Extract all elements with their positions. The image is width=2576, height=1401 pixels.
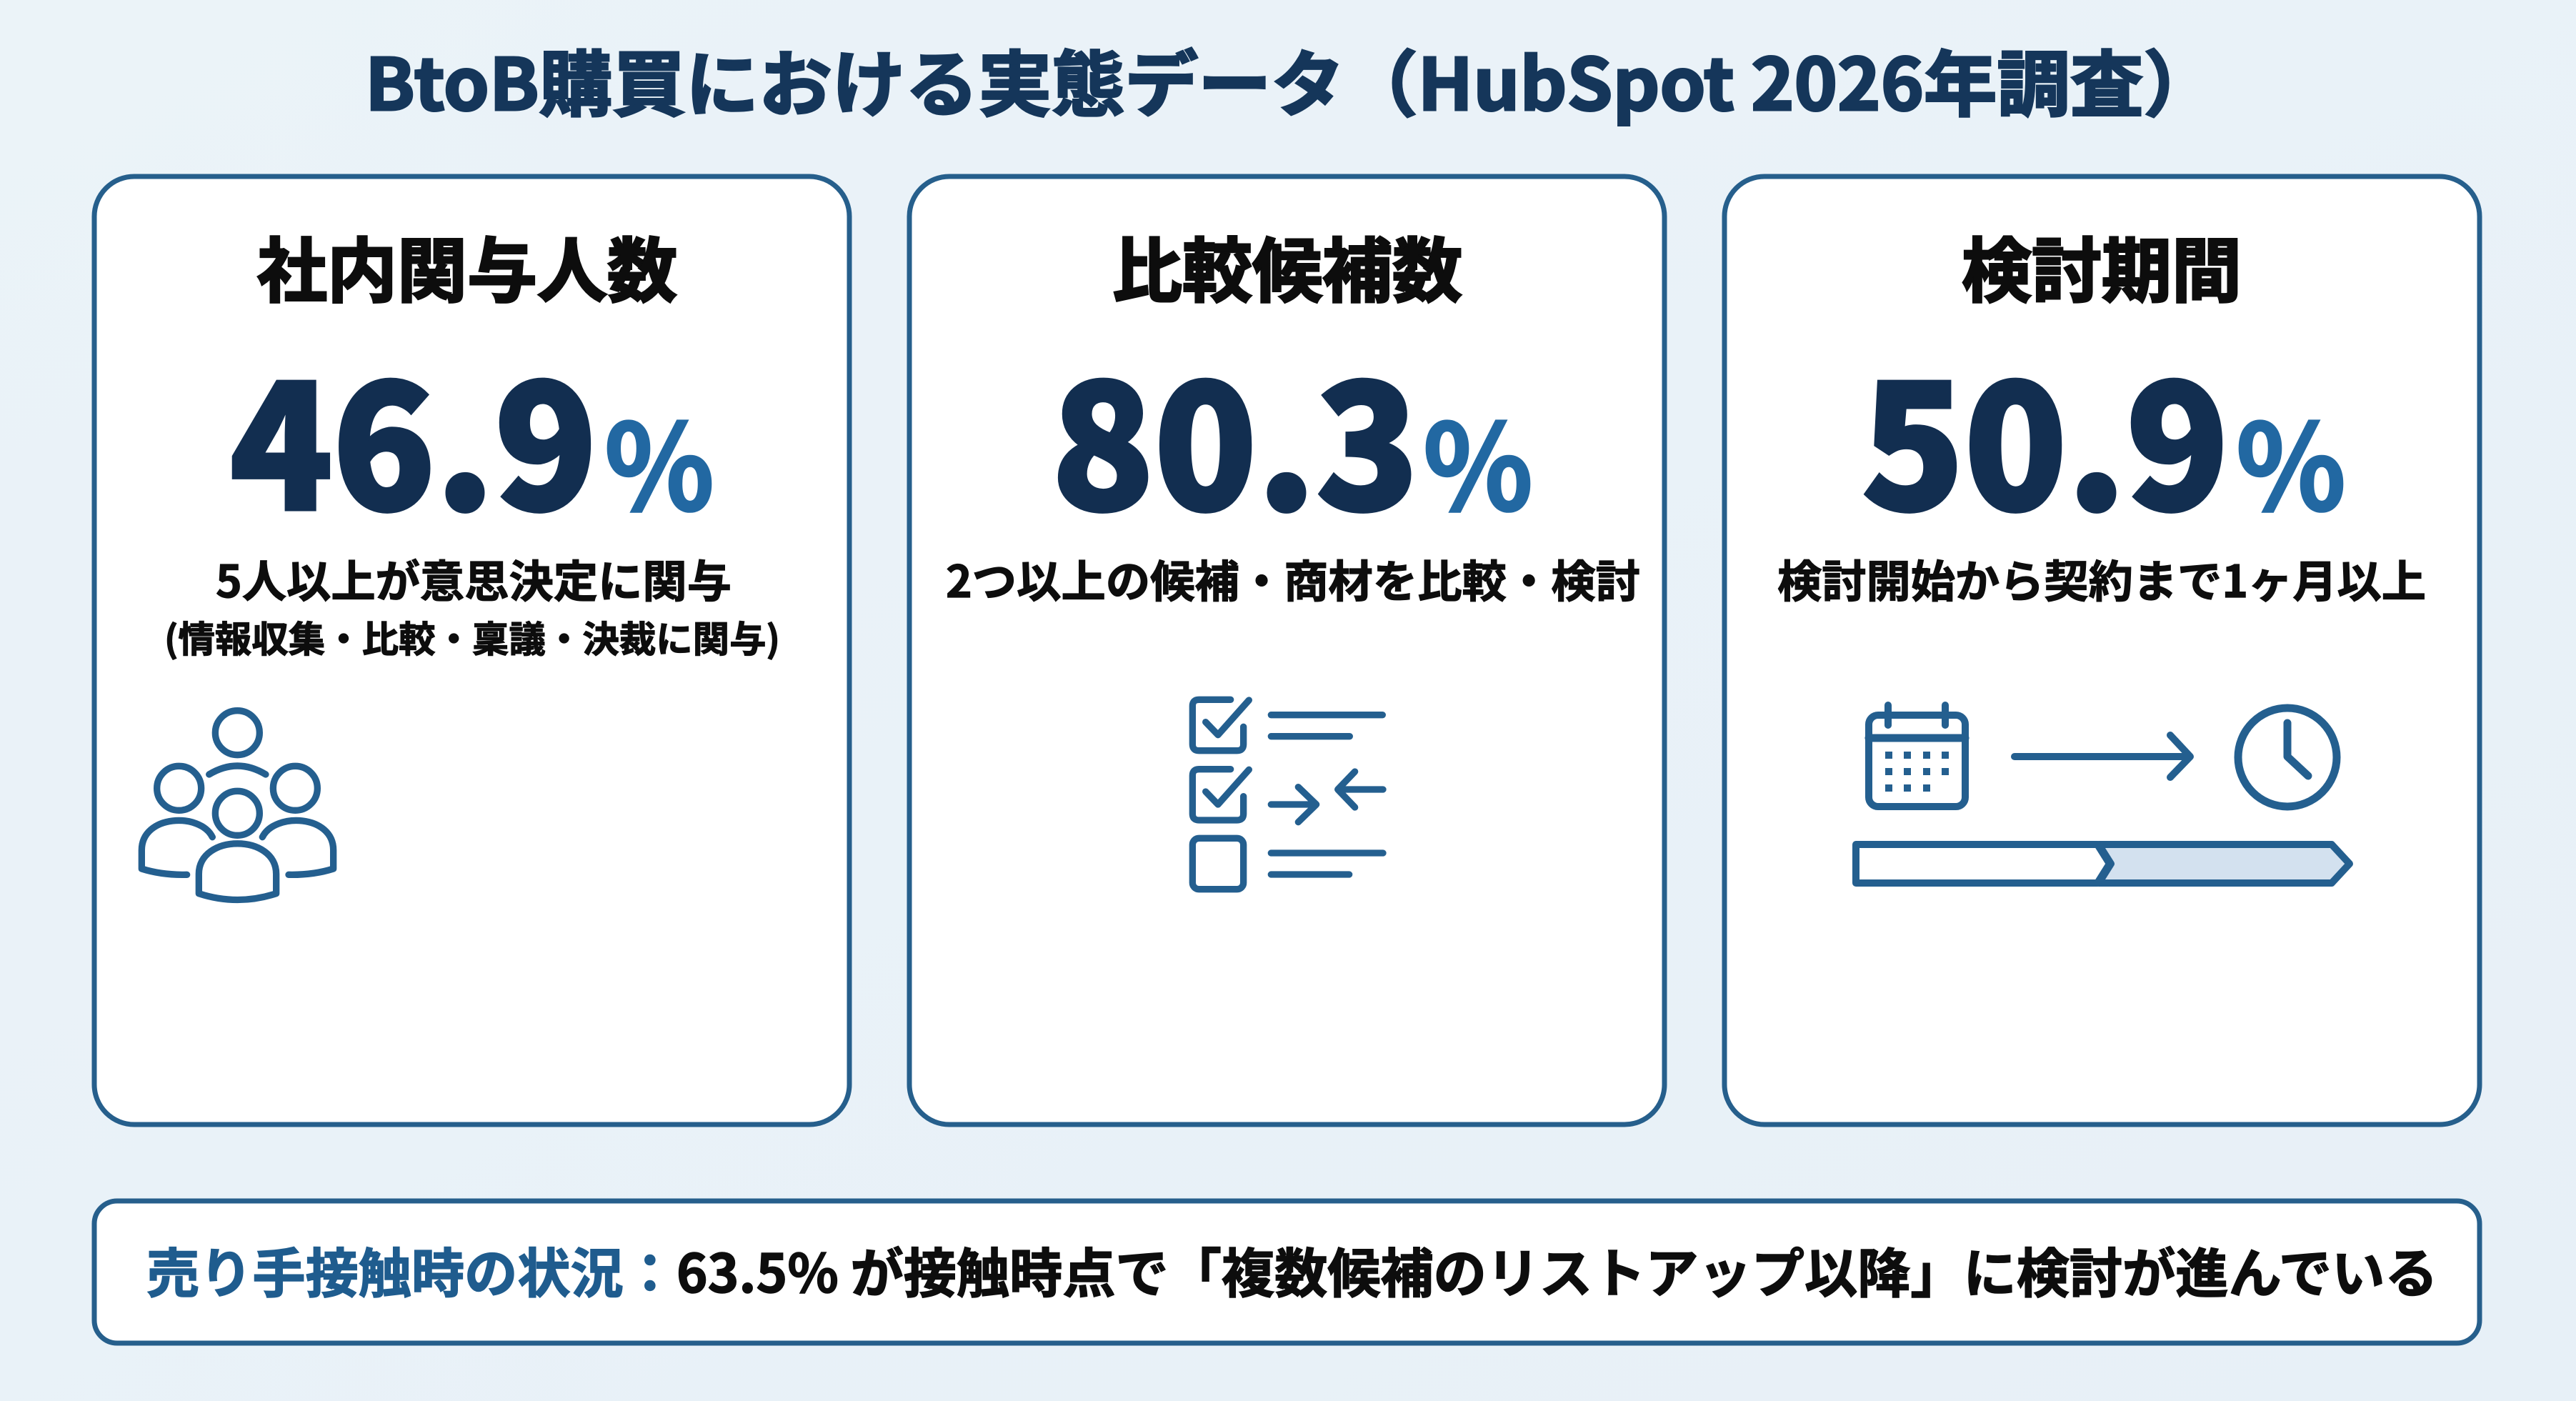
callout: 売り手接触時の状況: 売り手接触時の状況：63.5% が接触時点で「複数候補のリストアップ以降」に検討が進んでいる — [146, 1232, 2438, 1308]
description: 検討開始から契約まで1ヶ月以上 — [1777, 546, 2426, 610]
icon: clock — [2238, 708, 2337, 807]
description: 5人以上が意思決定に関与 — [216, 546, 732, 610]
icon: checklist comparison — [1192, 699, 1383, 889]
callout: 売り手接触時の状況 — [94, 1201, 2480, 1343]
arrow: calendar to clock — [2015, 735, 2190, 777]
panel: 比較候補数 — [909, 176, 1664, 1125]
note: (情報収集・比較・稟議・決裁に関与) — [164, 610, 780, 663]
progress bar — [1856, 844, 2350, 883]
stat: 50.9%: 50.9 — [1862, 311, 2229, 559]
heading: 検討期間: 検討期間 — [1962, 215, 2242, 316]
description: 2つ以上の候補・商材を比較・検討 — [946, 546, 1640, 610]
panel: 検討期間 — [1724, 176, 2480, 1125]
heading: 社内関与人数: 社内関与人数 — [257, 215, 677, 316]
stat: 46.9%: % — [604, 372, 714, 544]
panel: 社内関与人数 — [94, 176, 849, 1125]
stat: 50.9%: % — [2236, 372, 2346, 544]
stat: 46.9%: 46.9 — [230, 311, 597, 559]
heading: 比較候補数: 比較候補数 — [1112, 215, 1462, 316]
icon: group of people — [141, 711, 334, 899]
stat: 80.3%: 80.3 — [1052, 311, 1419, 559]
title: BtoB購買における実態データ（HubSpot 2026年調査） — [365, 27, 2217, 131]
stat: 80.3%: % — [1423, 372, 1533, 544]
icon: calendar — [1869, 705, 1965, 807]
